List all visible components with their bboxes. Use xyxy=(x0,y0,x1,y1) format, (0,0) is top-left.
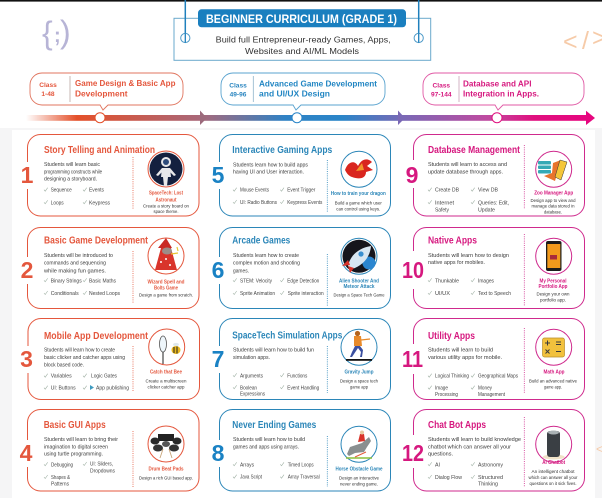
icon: dragon xyxy=(341,151,377,187)
number 2: 2 xyxy=(21,257,33,283)
checklist xyxy=(44,278,120,297)
description: while making fun games. xyxy=(43,268,106,274)
description: questions. xyxy=(428,451,453,457)
project: Zoo Manager App: Design app to view and xyxy=(530,198,576,204)
icon: code tag decoration xyxy=(563,24,602,56)
checklist: Processing xyxy=(435,392,458,398)
heading: Basic Game Development xyxy=(44,236,149,247)
checklist: Mouse Events xyxy=(240,188,269,194)
checklist: Debugging xyxy=(51,462,73,468)
description: Students will learn basic xyxy=(44,162,100,168)
description xyxy=(233,437,305,451)
description xyxy=(44,348,125,368)
project: Zoo Manager App xyxy=(530,191,576,216)
heading: Interactive Gaming Apps xyxy=(232,145,333,156)
description: Students will be introduced to xyxy=(44,253,113,259)
panel: card 9 database management xyxy=(406,134,584,216)
description: native apps for mobiles. xyxy=(428,260,485,266)
project: AI Chatbot xyxy=(528,460,578,487)
project: SpaceTech Lost Astronaut: Create a story board on xyxy=(143,204,189,210)
project: Drum Beat Pads xyxy=(139,466,193,482)
checklist xyxy=(233,373,319,398)
project: Gravity Jump: Gravity Jump xyxy=(344,369,374,375)
checklist xyxy=(233,462,320,481)
heading: Mobile App Development xyxy=(44,331,149,342)
project: Horse Obstacle Game xyxy=(336,466,383,488)
callout: class 1-48: Game Design & Basic App xyxy=(75,78,176,88)
project: Alien Shooter: Alien Shooter And xyxy=(339,278,379,284)
description: Students will learn how to design xyxy=(428,253,509,259)
checklist: Dialog Flow xyxy=(435,475,462,481)
checklist: Text to Speech xyxy=(478,291,511,297)
checklist xyxy=(428,374,518,398)
description xyxy=(428,437,521,457)
description xyxy=(44,162,102,183)
heading: Chat Bot Apps xyxy=(428,420,486,431)
number 6: 6 xyxy=(212,257,224,283)
icon: code tag decoration: / xyxy=(582,27,589,55)
project: Math App xyxy=(529,369,577,391)
white content panel xyxy=(12,130,595,498)
project: SpaceTech Lost Astronaut: SpaceTech: Lost xyxy=(149,191,183,197)
callout: class 97-144 xyxy=(423,73,584,110)
description: Students will learn how to build fun xyxy=(233,347,314,353)
description: Students will learn how to create xyxy=(44,348,115,354)
checklist: Sequence xyxy=(51,188,72,194)
description xyxy=(43,253,113,274)
panel: card 2 basic game development xyxy=(21,228,199,308)
checklist xyxy=(44,374,129,392)
callout: class 49-96: 49-96 xyxy=(230,92,247,99)
project: Drum Beat Pads: Design a rich GUI based app. xyxy=(139,476,193,482)
project: Horse Obstacle Game: Horse Obstacle Game xyxy=(336,466,383,472)
description xyxy=(428,162,507,175)
project: Math App: Math App xyxy=(544,369,564,375)
checklist: Thinking xyxy=(478,482,498,488)
panel: card 4 basic gui apps xyxy=(20,410,199,491)
project: AI Chatbot: An intelligent chatbot xyxy=(532,469,575,475)
callout: class 49-96: and UI/UX Design xyxy=(259,89,330,99)
project: How to train your dragon: can control using keys. xyxy=(336,207,380,213)
checklist: Loops xyxy=(51,200,64,206)
callout: class 97-144: Class xyxy=(432,82,450,89)
number 7: 7 xyxy=(212,346,224,372)
icon: jumping astronaut xyxy=(341,329,377,365)
icon: smart speaker xyxy=(536,426,572,462)
checklist: App publishing xyxy=(96,386,129,392)
checklist: Keypress Events xyxy=(287,200,323,206)
heading: Basic GUI Apps xyxy=(44,420,106,431)
project: Wizard Spell: Wizard Spell and xyxy=(148,279,184,285)
description: Students learn how to create xyxy=(233,253,299,259)
checklist xyxy=(233,278,324,297)
project: AI Chatbot: questions on it sick fives. xyxy=(530,481,576,487)
project: Zoo Manager App: manage data stored in xyxy=(532,204,575,210)
checklist: Structured xyxy=(478,475,503,481)
number 8: 8 xyxy=(212,440,225,466)
panel: card 8 never ending games xyxy=(212,410,390,491)
checklist xyxy=(428,462,503,488)
description: various utility apps for mobile. xyxy=(428,355,502,361)
checklist: Arrays xyxy=(240,462,254,468)
callout: class 1-48: 1-48 xyxy=(41,91,55,98)
panel: card 3 mobile app development xyxy=(20,318,200,400)
checklist: Internet xyxy=(435,200,455,206)
description: commands and sequencing xyxy=(44,261,106,267)
checklist: Event Handling xyxy=(287,385,319,391)
checklist xyxy=(233,188,323,206)
icon: horse xyxy=(341,426,377,462)
number 5: 5 xyxy=(212,162,225,188)
heading: Database Management xyxy=(428,145,521,156)
description: Students will learn to bring their xyxy=(44,437,118,443)
callout: class 97-144: Database and API xyxy=(463,78,532,88)
checklist: Binary Strings xyxy=(51,278,82,284)
project: Math App: Build an advanced native xyxy=(529,379,577,385)
checklist: Edge Detection xyxy=(287,278,319,284)
project: Catch that Bee: clicker catcher app xyxy=(148,385,185,391)
checklist: Conditionals xyxy=(51,291,79,297)
panel: card 6 arcade games xyxy=(212,228,390,308)
icon: bee and net xyxy=(149,329,185,365)
description: update database through apps. xyxy=(428,169,503,175)
description: games and apps using arrays. xyxy=(233,445,299,451)
checklist: Update xyxy=(478,207,495,213)
icon: rocket xyxy=(341,238,377,274)
panel: card 5 interactive gaming apps xyxy=(212,134,390,216)
checklist: Keypress xyxy=(89,200,110,206)
description: Students learn how to build apps xyxy=(233,162,308,168)
heading: Arcade Games xyxy=(232,236,291,247)
project: My Personal Portfolio App xyxy=(536,278,570,303)
checklist: Expressions xyxy=(240,392,265,398)
checklist: Timed Loops xyxy=(288,462,314,468)
project: How to train your dragon: How to train your dragon xyxy=(331,191,386,197)
checklist: Image xyxy=(435,386,448,392)
number 1: 1 xyxy=(21,162,34,188)
icon: code tag decoration: < xyxy=(563,28,578,56)
project: How to train your dragon: Build a game which user xyxy=(335,201,382,207)
checklist: Variables xyxy=(51,374,72,380)
checklist: Arguments xyxy=(240,373,263,379)
checklist: Patterns xyxy=(51,481,69,487)
description: Students will learn to access and xyxy=(428,162,507,168)
description: games. xyxy=(233,268,249,274)
description: having UI and User interaction. xyxy=(233,170,304,176)
checklist: Thunkable xyxy=(435,278,459,284)
checklist: Images xyxy=(478,278,494,284)
icon: database and document xyxy=(536,151,572,187)
description: complex motion and shooting xyxy=(233,261,300,267)
description: block based code. xyxy=(44,362,84,368)
subtitle xyxy=(216,35,391,56)
checklist: Sprite Animation xyxy=(240,291,275,297)
description: basic clicker and catcher apps using xyxy=(44,355,125,361)
number 12: 12 xyxy=(402,440,424,466)
checklist: Management xyxy=(478,392,505,398)
number 9: 9 xyxy=(406,162,418,188)
project: Drum Beat Pads: Drum Beat Pads xyxy=(148,466,184,472)
project: SpaceTech Lost Astronaut: Astronaut xyxy=(156,197,177,203)
title: BEGINNER CURRICULUM (GRADE 1) xyxy=(206,14,397,26)
description xyxy=(428,348,502,361)
checklist: Safety xyxy=(435,207,449,213)
project: How to train your dragon xyxy=(331,191,386,213)
description: chatbot which can answer all your xyxy=(428,444,511,450)
description: programming constructs while xyxy=(44,169,102,175)
checklist: Create DB xyxy=(435,188,459,194)
checklist: Events xyxy=(89,188,104,194)
project: My Personal Portfolio App: My Personal xyxy=(540,278,567,284)
project: AI Chatbot: AI Chatbot xyxy=(542,460,565,466)
description: using turtle programming. xyxy=(44,452,103,458)
checklist: Event Trigger xyxy=(287,188,315,194)
project: Gravity Jump xyxy=(340,369,378,391)
project: Wizard Spell: Bolts Game xyxy=(154,285,178,291)
project: Horse Obstacle Game: Design an interactive xyxy=(339,476,379,482)
timeline arrow xyxy=(26,110,595,125)
number 10: 10 xyxy=(402,257,424,283)
project: Catch that Bee: Catch that Bee xyxy=(150,369,182,375)
checklist: Functions xyxy=(287,373,308,379)
description xyxy=(233,162,308,176)
heading: Never Ending Games xyxy=(232,420,317,431)
project: Catch that Bee xyxy=(146,369,187,391)
panel: card 12 chat bot apps xyxy=(402,410,584,491)
icon: code face decoration xyxy=(42,14,71,51)
checklist: Money xyxy=(478,386,492,392)
checklist: Java Script xyxy=(240,475,262,481)
icon: astronaut xyxy=(148,151,184,187)
project: Catch that Bee: Create a multiscreen xyxy=(146,378,187,384)
checklist: Array Traversal xyxy=(288,475,320,481)
checklist xyxy=(44,188,110,206)
icon: math calculator xyxy=(536,329,572,365)
number 4: 4 xyxy=(20,440,33,466)
project: AI Chatbot: which can answer all your xyxy=(528,475,578,481)
checklist xyxy=(428,278,511,297)
checklist: Basic Maths xyxy=(89,278,116,284)
project: SpaceTech Lost Astronaut: space theme. xyxy=(154,209,178,215)
heading: Utility Apps xyxy=(428,331,475,342)
icon: code face decoration: { xyxy=(42,15,53,51)
checklist: STEM: Velocity xyxy=(240,278,272,284)
callout: class 97-144: Integration in Apps. xyxy=(463,89,539,99)
project: My Personal Portfolio App: portfolio app. xyxy=(540,297,566,303)
panel: card 11 utility apps xyxy=(402,318,584,400)
project: Alien Shooter: Design a Space Tech Game xyxy=(334,293,385,299)
callout: class 97-144: 97-144 xyxy=(431,92,452,99)
project: Zoo Manager App: Zoo Manager App xyxy=(534,191,573,197)
checklist: UI: Radio Buttons xyxy=(240,200,277,206)
header box xyxy=(174,0,431,60)
project: Horse Obstacle Game: never ending game. xyxy=(340,482,378,488)
checklist: Astronomy xyxy=(478,462,503,468)
checklist xyxy=(44,462,115,487)
callout: class 1-48: Class xyxy=(39,82,57,89)
project: Gravity Jump: game app xyxy=(350,386,368,391)
icon: wizard xyxy=(148,238,184,274)
checklist: UI: Buttons xyxy=(51,386,76,392)
description xyxy=(44,437,118,458)
project: SpaceTech Lost Astronaut xyxy=(143,191,189,215)
checklist: Geographical Maps xyxy=(478,374,518,380)
checklist: UI/UX xyxy=(435,291,450,297)
callout: class 1-48 xyxy=(30,73,183,110)
project: Math App: game app. xyxy=(544,386,562,391)
checklist: Dropdowns xyxy=(90,468,115,474)
checklist xyxy=(428,188,509,213)
checklist: AI xyxy=(435,462,440,468)
checklist: Logic Gates xyxy=(91,374,117,380)
project: Wizard Spell: Design a game from scratch. xyxy=(139,293,193,299)
checklist: UI: Sliders, xyxy=(90,462,113,468)
checklist: Boolean xyxy=(240,385,257,391)
number 3: 3 xyxy=(20,346,33,372)
project: My Personal Portfolio App: Design your own xyxy=(536,292,570,298)
heading: Native Apps xyxy=(428,236,477,247)
description xyxy=(233,347,314,361)
icon: code face decoration: ) xyxy=(60,14,71,50)
checklist: Nested Loops xyxy=(89,291,120,297)
description: Students will learn how to build xyxy=(233,437,305,443)
description xyxy=(233,253,300,274)
project: Zoo Manager App: database. xyxy=(544,210,562,216)
project: Alien Shooter xyxy=(334,278,385,299)
subtitle: Build full Entrepreneur-ready Games, Apps, xyxy=(216,35,391,44)
project: Alien Shooter: Meteor Attack xyxy=(344,284,375,290)
panel: card 1 story telling xyxy=(21,134,199,216)
heading: SpaceTech Simulation Apps xyxy=(232,331,343,342)
checklist: Sprite interaction xyxy=(288,291,324,297)
callout: class 49-96: Class xyxy=(229,82,247,89)
description xyxy=(428,253,509,266)
description: designing a storyboard. xyxy=(44,177,97,183)
callout: class 1-48: Development xyxy=(75,88,128,98)
description: imagination to digital screen xyxy=(44,444,108,450)
subtitle: Websites and AI/ML Models xyxy=(245,47,359,56)
icon: code face decoration: ; xyxy=(54,25,61,47)
checklist: Logical Thinking xyxy=(435,374,469,380)
checklist: Shapes & xyxy=(51,475,70,481)
project: My Personal Portfolio App: Portfolio App xyxy=(538,284,568,290)
project: Gravity Jump: Design a space tech xyxy=(340,379,378,385)
callout: class 49-96: Advanced Game Development xyxy=(259,78,377,88)
icon: drum pads xyxy=(148,426,184,462)
checklist: Queries: Edit, xyxy=(478,200,509,206)
checklist: View DB xyxy=(478,188,498,194)
icon: phone portfolio xyxy=(536,238,572,274)
description: simulation apps. xyxy=(233,355,270,361)
title xyxy=(198,9,406,27)
panel: card 10 native apps xyxy=(402,228,584,308)
panel: card 7 spacetech simulation apps xyxy=(212,318,390,400)
callout: class 49-96 xyxy=(221,73,385,110)
description: Students will learn to build knowledge xyxy=(428,437,521,443)
heading: Story Telling and Animation xyxy=(44,145,155,156)
project: Wizard Spell xyxy=(139,279,193,299)
number 11: 11 xyxy=(402,346,423,372)
description: Students will learn to build xyxy=(428,348,493,354)
